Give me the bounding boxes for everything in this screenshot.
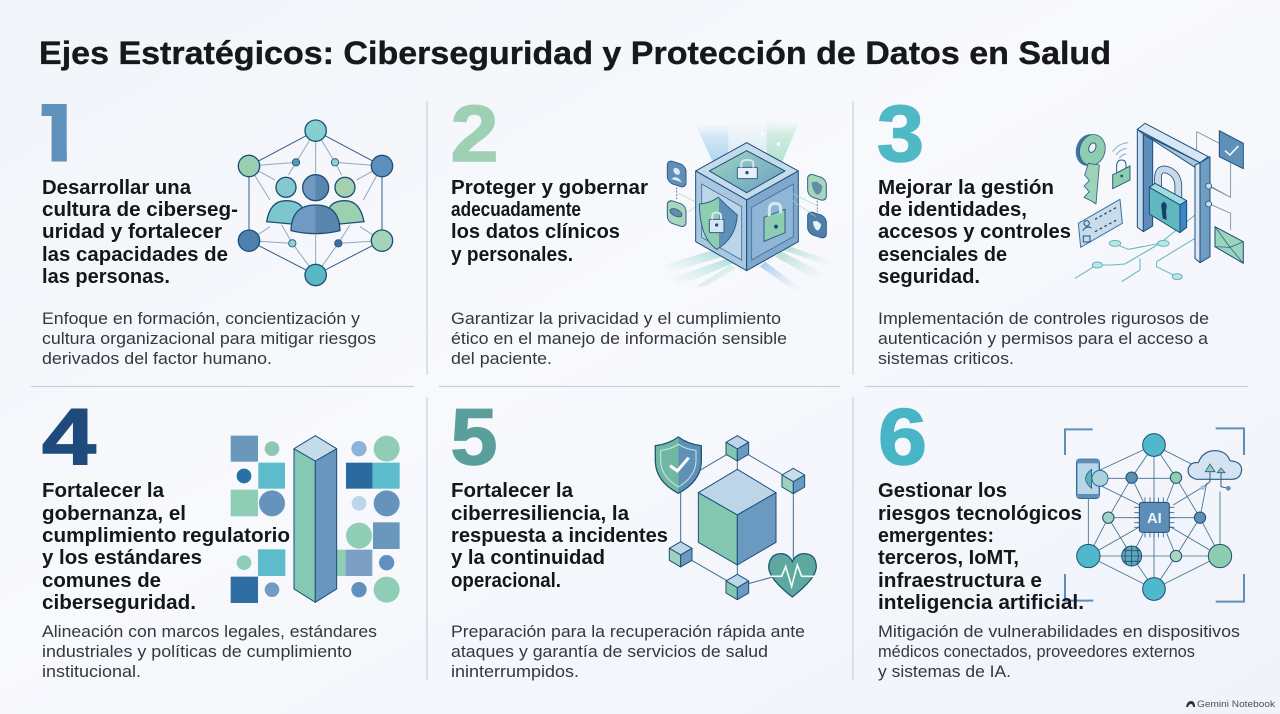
heading 1: las personas.	[42, 266, 170, 288]
heading 1: cultura de ciberseg-	[42, 199, 238, 221]
heading 2: los datos clínicos	[451, 221, 620, 243]
heading 3: accesos y controles	[878, 221, 1071, 243]
heading 1: Desarrollar una	[42, 177, 192, 199]
icon: resilience cube with shield and heart	[655, 436, 822, 600]
body 5: ininterrumpidos.	[451, 662, 579, 681]
body 1: derivados del factor humano.	[42, 349, 272, 368]
heading 2	[451, 177, 648, 266]
heading 6: terceros, IoMT,	[878, 547, 1019, 569]
heading 4	[42, 480, 290, 614]
heading 5: Fortalecer la	[451, 480, 574, 502]
body 5: ataques y garantía de servicios de salud	[451, 642, 768, 661]
heading 6: riesgos tecnológicos	[878, 503, 1082, 525]
watermark: Gemini Notebook: Gemini Notebook	[1197, 699, 1275, 710]
heading 3: esenciales de	[878, 244, 1007, 266]
title: Ejes Estratégicos: Ciberseguridad y Protección de Datos en Salud	[39, 35, 1111, 71]
icon: people network	[238, 120, 393, 286]
number 6: 6	[878, 392, 927, 481]
number 1	[42, 104, 67, 162]
heading 5: y la continuidad	[451, 547, 605, 569]
panel 5: ciberresiliencia	[450, 392, 822, 681]
body 2: ético en el manejo de información sensible	[451, 329, 787, 348]
heading 4: Fortalecer la	[42, 480, 165, 502]
heading 2: Proteger y gobernar	[451, 177, 648, 199]
panel 6: riesgos tecnológicos	[878, 392, 1244, 681]
heading 4: comunes de	[42, 570, 161, 592]
panel 3: identidades y accesos	[877, 89, 1243, 368]
heading 3	[878, 177, 1071, 288]
body 4	[42, 622, 377, 681]
body 5: Preparación para la recuperación rápida ante	[451, 622, 805, 641]
icon: AI chip network	[1065, 428, 1244, 602]
heading 4: cumplimiento regulatorio	[42, 525, 290, 547]
heading 3: de identidades,	[878, 199, 1027, 221]
body 4: industriales y políticas de cumplimiento	[42, 642, 352, 661]
icon: data vault cube	[663, 120, 830, 290]
number 1: 1	[30, 89, 76, 178]
body 6	[878, 622, 1240, 681]
heading 2: adecuadamente	[451, 199, 581, 221]
heading 4: ciberseguridad.	[42, 592, 196, 614]
panel 1: cultura de ciberseguridad	[30, 89, 393, 368]
body 1: cultura organizacional para mitigar riesgos	[42, 329, 376, 348]
heading 6: Gestionar los	[878, 480, 1007, 502]
number 2: 2	[450, 89, 498, 178]
icon: key, padlock and gate	[1072, 123, 1243, 282]
body 4: institucional.	[42, 662, 141, 681]
heading 3: Mejorar la gestión	[878, 177, 1054, 199]
body 2: Garantizar la privacidad y el cumplimiento	[451, 309, 781, 328]
heading 4: gobernanza, el	[42, 503, 186, 525]
body 3: Implementación de controles rigurosos de	[878, 309, 1209, 328]
body 6: médicos conectados, proveedores externos	[878, 642, 1195, 661]
body 5	[451, 622, 805, 681]
heading 6: emergentes:	[878, 525, 994, 547]
body 2: del paciente.	[451, 349, 552, 368]
number 5: 5	[450, 392, 498, 481]
panel 2: datos clínicos	[450, 89, 830, 368]
heading 5: respuesta a incidentes	[451, 525, 668, 547]
heading 6	[878, 480, 1084, 614]
heading 3: seguridad.	[878, 266, 980, 288]
heading 6: inteligencia artificial.	[878, 592, 1084, 614]
heading 5	[451, 480, 668, 592]
body 1: Enfoque en formación, concientización y	[42, 309, 361, 328]
icon: governance pillar with blocks	[231, 436, 400, 603]
number 3: 3	[877, 89, 924, 178]
heading 1: las capacidades de	[42, 244, 228, 266]
body 3: autenticación y permisos para el acceso a	[878, 329, 1209, 348]
body 3: sistemas criticos.	[878, 349, 1014, 368]
heading 5: ciberresiliencia, la	[451, 503, 630, 525]
chip label: AI	[1147, 511, 1162, 527]
number 4: 4	[42, 392, 97, 481]
panel 4: gobernanza	[42, 392, 400, 681]
heading 4: y los estándares	[42, 547, 202, 569]
heading 2: y personales.	[451, 244, 573, 266]
body 6: Mitigación de vulnerabilidades en dispositivos	[878, 622, 1240, 641]
heading 5: operacional.	[451, 570, 561, 592]
heading 1	[42, 177, 238, 288]
body 4: Alineación con marcos legales, estándares	[42, 622, 377, 641]
heading 1: uridad y fortalecer	[42, 221, 222, 243]
body 6: y sistemas de IA.	[878, 662, 1011, 681]
body 3	[878, 309, 1209, 368]
body 2	[451, 309, 787, 368]
body 1	[42, 309, 376, 368]
heading 6: infraestructura e	[878, 570, 1042, 592]
